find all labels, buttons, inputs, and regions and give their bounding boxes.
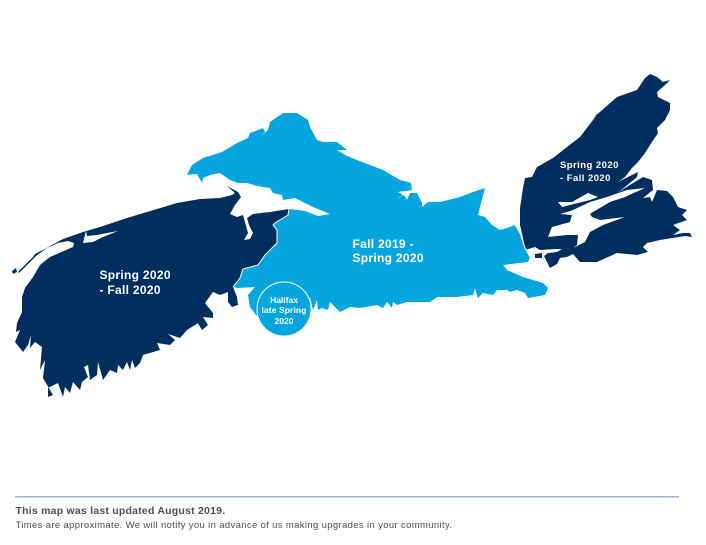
- region: Cape Breton, Spring 2020 - Fall 2020: [520, 74, 692, 268]
- Halifax circle callout: 2020: [275, 316, 294, 326]
- label: Spring 2020 - Fall 2020 (Cape Breton): [560, 160, 619, 184]
- label: Spring 2020 - Fall 2020 (Cape Breton): - Fall 2020: [560, 173, 611, 184]
- small island: [535, 253, 542, 258]
- region: southwest Nova Scotia, Spring 2020 - Fall 2020: [12, 186, 289, 397]
- Halifax circle callout: late Spring: [261, 305, 307, 315]
- label: Spring 2020 - Fall 2020 (southwest): - Fall 2020: [100, 283, 161, 297]
- footer note: This map was last updated August 2019.: [16, 505, 225, 517]
- white boundary between regions: [233, 209, 289, 287]
- footer note: Times are approximate. We will notify you in advance of us making upgrades in your community.: [16, 520, 452, 531]
- Bras d'Or lake: [548, 188, 645, 248]
- label: Spring 2020 - Fall 2020 (southwest): [100, 268, 171, 297]
- label: Fall 2019 - Spring 2020: Spring 2020: [352, 251, 424, 265]
- footer note: [16, 505, 452, 531]
- footer rule: [15, 496, 679, 498]
- label: Spring 2020 - Fall 2020 (southwest): Spring 2020: [100, 268, 171, 282]
- white inlet sliver: [83, 231, 118, 243]
- region: central Nova Scotia, Fall 2019 - Spring 2020: [187, 113, 548, 315]
- label: Spring 2020 - Fall 2020 (Cape Breton): Spring 2020: [560, 160, 619, 171]
- Halifax circle callout: Halifax: [270, 295, 298, 305]
- label: Fall 2019 - Spring 2020: [352, 237, 424, 265]
- label: Fall 2019 - Spring 2020: Fall 2019 -: [352, 237, 414, 251]
- Halifax circle callout: [257, 282, 311, 336]
